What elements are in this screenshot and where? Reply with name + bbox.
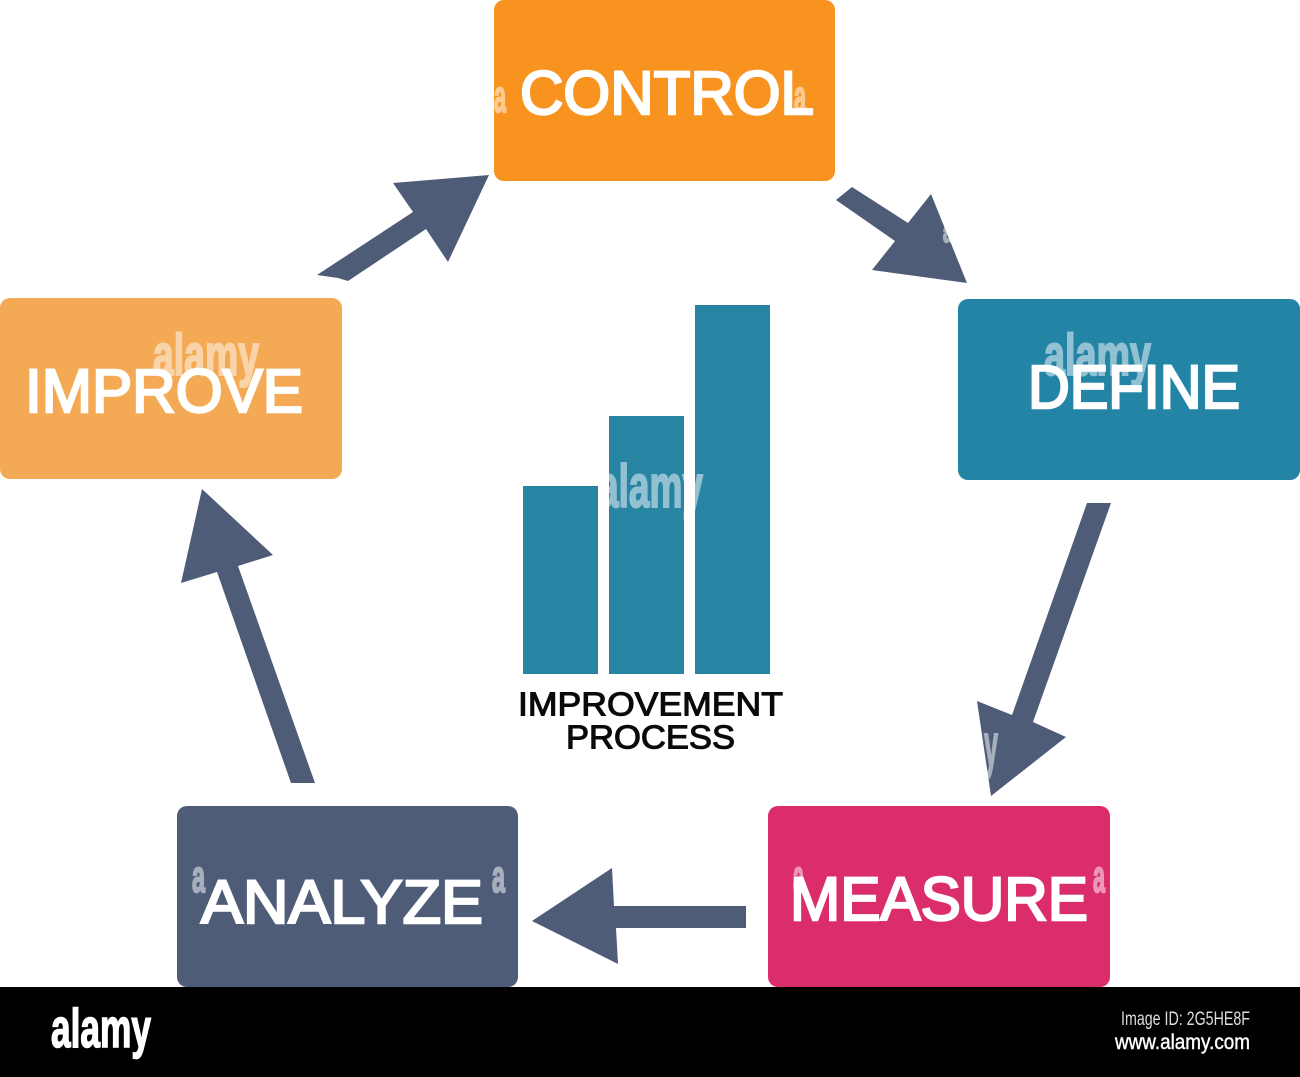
watermarks: a (192, 851, 206, 902)
watermarks: a (492, 851, 506, 902)
watermarks: a (1093, 851, 1105, 902)
panel: define (958, 299, 1300, 480)
arrow: improve to control (317, 175, 489, 281)
panel: control (494, 0, 835, 181)
watermarks: alamy (153, 323, 259, 388)
watermarks: a (943, 216, 953, 249)
label: measure: MEASURE (790, 865, 1088, 933)
label: control: CONTROL (520, 59, 814, 127)
footer bar (0, 987, 1300, 1077)
label: define: DEFINE (1028, 353, 1240, 421)
footer logo: alamy (51, 997, 151, 1059)
caption: improvement process: IMPROVEMENT (518, 686, 783, 724)
website: www.alamy.com (1114, 1031, 1250, 1054)
panel: analyze (177, 806, 518, 987)
watermarks: a (494, 71, 506, 122)
watermarks: alamy (1044, 323, 1151, 388)
watermarks: a (793, 851, 804, 902)
label: improve: IMPROVE (25, 357, 303, 425)
panel: improve (0, 298, 342, 479)
caption: improvement process (518, 686, 783, 756)
arrow: measure to analyze (532, 868, 746, 964)
watermarks: y (984, 712, 998, 779)
arrow: analyze to improve (181, 489, 315, 783)
bar chart: improvement (523, 305, 770, 674)
panel: measure (768, 806, 1110, 987)
watermarks: a (794, 71, 806, 122)
watermarks (153, 71, 1151, 902)
arrow: control to define (836, 187, 967, 283)
label: analyze: ANALYZE (201, 868, 483, 936)
arrow: define to measure (977, 503, 1111, 796)
watermarks: alamy (598, 453, 703, 520)
caption: improvement process: PROCESS (566, 720, 735, 756)
image id: Image ID: 2G5HE8F (1121, 1009, 1250, 1030)
